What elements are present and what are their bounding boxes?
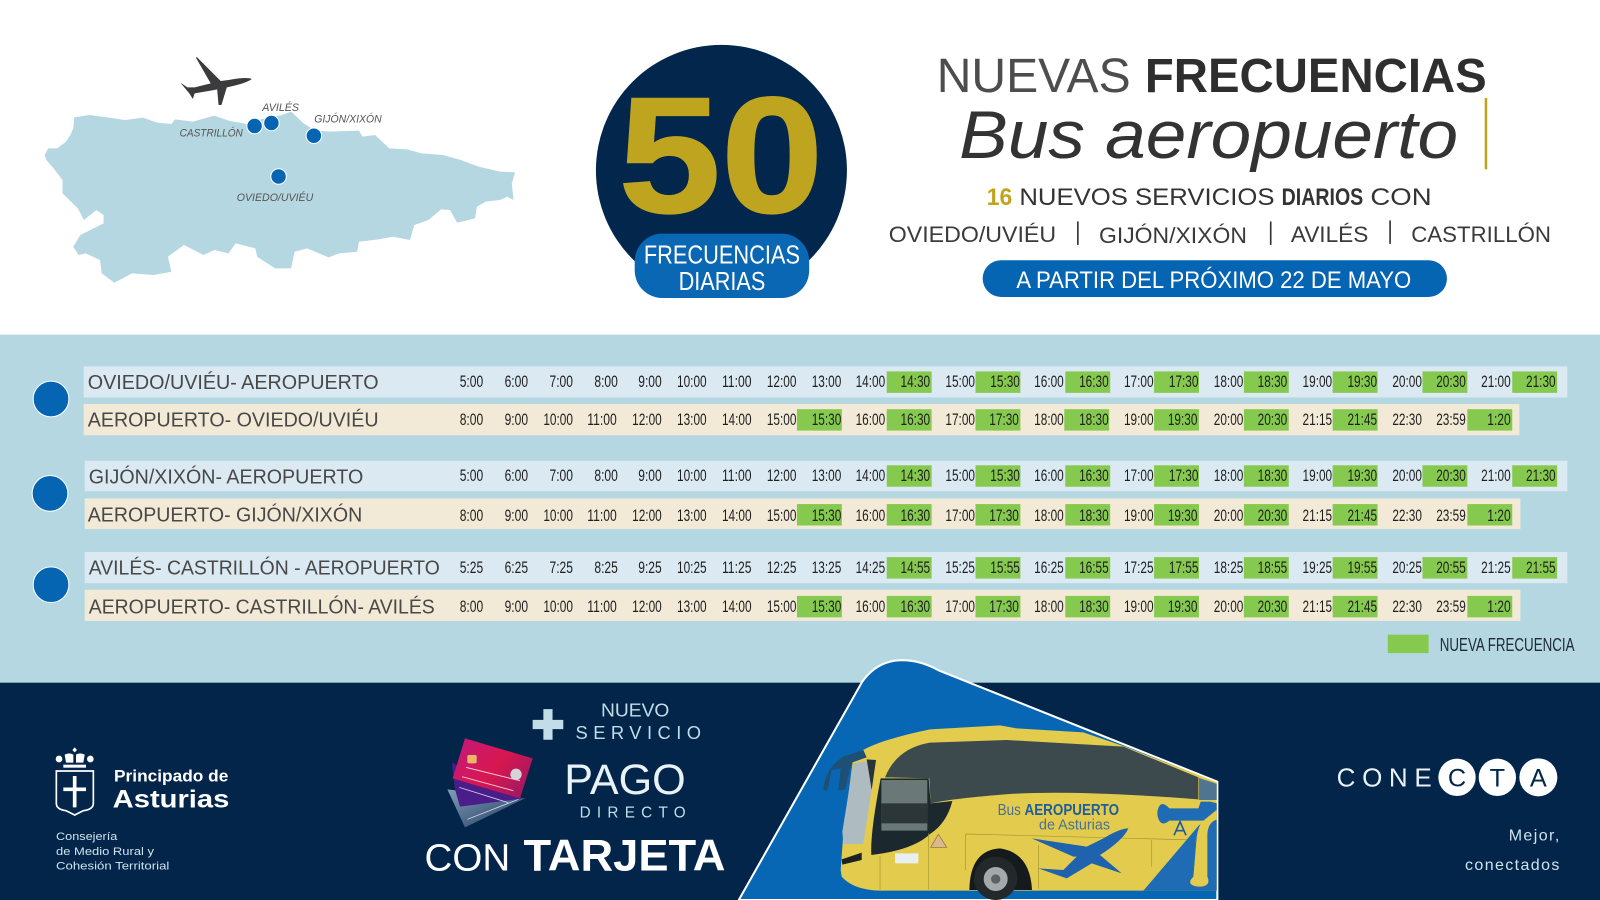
row: Oviedo to airport: 16:00 [1034,373,1064,391]
title block [889,50,1551,297]
row: airport to Oviedo: 1:20 [1487,411,1511,429]
icon: crown [56,747,94,768]
row: airport to Gijón: 1:20 [1487,507,1511,525]
logo: Conecta: A [1530,765,1547,793]
row: airport to Oviedo: 12:00 [632,411,662,429]
row: airport to Avilés: 20:30 [1258,598,1287,616]
row: Avilés to airport: 18:25 [1214,559,1243,577]
row: Avilés to airport [85,552,1567,583]
row: airport to Oviedo: 23:59 [1436,411,1466,429]
row: Oviedo to airport: 21:00 [1481,373,1511,391]
row: Oviedo to airport: 19:30 [1347,373,1377,391]
row: airport to Avilés: 15:30 [812,598,841,616]
panel: timetable [0,335,1600,683]
warning sticker [931,834,947,847]
row: Avilés to airport: 19:25 [1303,559,1332,577]
row: airport to Oviedo: 20:00 [1214,411,1243,429]
row: Oviedo to airport: 7:00 [549,373,573,391]
legend: nueva frecuencia [1388,634,1575,655]
icon: shield with cross [56,771,93,815]
tagline: mejor, conectados: Mejor, [1509,828,1559,845]
row: airport to Gijón: 12:00 [632,507,662,525]
bus lettering: Bus AEROPUERTO [998,802,1119,819]
row: airport to Gijón: 18:00 [1034,507,1064,525]
row: Gijón to airport: 20:00 [1392,467,1422,485]
logo: Conecta [1337,758,1559,874]
row: Gijón to airport: 8:00 [594,467,618,485]
row: Oviedo to airport: 12:00 [767,373,796,391]
row: airport to Gijón: 10:00 [543,507,573,525]
row: airport to Avilés: 16:30 [901,598,930,616]
row: airport to Gijón: 8:00 [460,507,483,525]
bus decal: blue triangle [1143,809,1217,891]
row: Oviedo to airport: 15:30 [990,373,1020,391]
row: Gijón to airport: 16:00 [1034,467,1064,485]
row: Avilés to airport: 12:25 [767,559,796,577]
pill: frecuencias diarias: DIARIAS [679,268,765,296]
row: Avilés to airport: AVILÉS- CASTRILLÓN - AEROPUERTO [89,556,440,579]
icon: airplane [180,57,252,105]
row: airport to Oviedo [84,404,1519,435]
row: Avilés to airport: 5:25 [460,559,483,577]
row: Oviedo to airport: 6:00 [505,373,528,391]
logo: Conecta: C [1448,765,1466,793]
row: airport to Gijón [85,498,1520,529]
text: consejería [56,831,169,872]
row: airport to Avilés: 18:00 [1034,598,1064,616]
row: airport to Avilés: 19:00 [1124,598,1154,616]
bus decal: airplane [1032,828,1128,878]
row: Oviedo to airport: 18:00 [1214,373,1243,391]
subtitle: 16 nuevos servicios [987,184,1432,211]
row: Gijón to airport: 6:00 [505,467,528,485]
row: airport to Oviedo: AEROPUERTO- OVIEDO/UVIÉU [88,409,379,432]
bus sticker [895,853,918,863]
bus side windows [885,740,1198,803]
row: airport to Gijón: 17:00 [945,507,975,525]
row: airport to Oviedo: 9:00 [505,411,528,429]
row: airport to Avilés: 13:00 [677,598,707,616]
row: airport to Gijón: 19:30 [1168,507,1197,525]
bus wheel [969,848,1032,900]
heading: bus aeropuerto: Bus aeropuerto [959,98,1458,173]
text: con tarjeta: TARJETA [523,829,726,880]
row: Oviedo to airport: 17:30 [1169,373,1198,391]
row: Gijón to airport: 14:00 [856,467,885,485]
row: airport to Gijón: 22:30 [1392,507,1422,525]
list of towns: CASTRILLÓN [1411,222,1551,247]
row: Avilés to airport: 21:55 [1526,559,1556,577]
route marker Gijón [32,476,68,511]
row: Oviedo to airport: 14:00 [856,373,885,391]
row: airport to Avilés: 8:00 [460,598,483,616]
row: Gijón to airport: 11:00 [722,467,752,485]
pill: frecuencias diarias: FRECUENCIAS [644,241,800,269]
row: Avilés to airport: 20:55 [1436,559,1466,577]
row: Avilés to airport: 17:25 [1124,559,1154,577]
row: Oviedo to airport [84,366,1567,397]
row: Avilés to airport: 18:55 [1258,559,1287,577]
bus lettering [998,804,1118,830]
bus mirror [823,750,867,791]
row: airport to Gijón: 16:00 [856,507,885,525]
row: Gijón to airport: 18:00 [1214,467,1243,485]
list of towns: GIJÓN/XIXÓN [1099,223,1247,248]
pill: start date [983,260,1447,297]
row: Avilés to airport: 6:25 [505,559,528,577]
row: airport to Gijón: 14:00 [722,507,752,525]
row: Oviedo to airport: 17:00 [1124,373,1154,391]
rear window [1199,778,1217,800]
bus body [841,725,1217,891]
text: con tarjeta [424,829,726,880]
row: airport to Gijón: 18:30 [1079,507,1109,525]
panel: map of Asturias [45,57,515,283]
heading: nuevas frecuencias: FRECUENCIAS [1145,50,1487,103]
row: Oviedo to airport: 11:00 [722,373,752,391]
row: Oviedo to airport: 21:30 [1526,373,1556,391]
map pin: Avilés [261,101,300,131]
row: Oviedo to airport: 13:00 [812,373,841,391]
row: Oviedo to airport: 10:00 [677,373,707,391]
row: Oviedo to airport: OVIEDO/UVIÉU- AEROPUERTO [88,371,379,394]
row: Gijón to airport: 10:00 [677,467,707,485]
row: Gijón to airport: 9:00 [638,467,662,485]
row: airport to Oviedo: 16:30 [901,411,930,429]
row: airport to Oviedo: 19:30 [1168,411,1197,429]
row: Avilés to airport: 14:55 [901,559,930,577]
row: Gijón to airport: 17:00 [1124,467,1154,485]
row: Gijón to airport: 5:00 [460,467,483,485]
row: Oviedo to airport: 15:00 [945,373,975,391]
row: Oviedo to airport: 20:00 [1392,373,1422,391]
bus decal: cross stem [1190,810,1217,887]
bus decal: cross arm [1157,802,1217,823]
row: Avilés to airport: 19:55 [1347,559,1377,577]
row: Gijón to airport: 12:00 [767,467,796,485]
map pin: Oviedo [237,169,314,204]
row: Avilés to airport: 15:55 [990,559,1020,577]
badge: 50 frecuencias diarias [596,45,847,298]
row: airport to Oviedo: 17:00 [945,411,975,429]
subtitle: 16 nuevos servicios: CON [1370,184,1432,211]
list of towns [889,220,1551,248]
row: airport to Avilés: 17:00 [945,598,975,616]
row: airport to Oviedo: 20:30 [1258,411,1287,429]
text: nuevo servicio: SERVICIO [576,722,701,743]
row: airport to Avilés: 11:00 [587,598,617,616]
heading: nuevas frecuencias [937,50,1487,103]
row: airport to Oviedo: 17:30 [989,411,1019,429]
list of towns: OVIEDO/UVIÉU [889,222,1056,247]
row: Gijón to airport: 14:30 [901,467,930,485]
row: Oviedo to airport: 5:00 [460,373,483,391]
map pin: Gijón [306,112,382,143]
row: Avilés to airport: 14:25 [856,559,885,577]
row: airport to Oviedo: 18:30 [1079,411,1109,429]
text: consejería: Cohesión Territorial [56,860,169,872]
text: pago directo: PAGO [564,756,686,804]
row: Gijón to airport: 16:30 [1079,467,1109,485]
row: airport to Avilés: 15:00 [767,598,796,616]
map pin: Avilés: AVILÉS [261,101,300,114]
row: airport to Avilés: 17:30 [989,598,1019,616]
bus panel lines [880,833,1197,889]
row: Gijón to airport: 20:30 [1436,467,1466,485]
row: Avilés to airport: 10:25 [677,559,707,577]
text: Principado de Asturias [113,768,229,814]
row: airport to Avilés: AEROPUERTO- CASTRILLÓN- AVILÉS [89,595,435,618]
illustration: bus [823,725,1217,900]
row: airport to Gijón: 20:30 [1258,507,1287,525]
subtitle: 16 nuevos servicios: NUEVOS SERVICIOS [1019,184,1274,211]
row: airport to Oviedo: 15:30 [812,411,841,429]
row: airport to Gijón: 11:00 [587,507,617,525]
map pin: Castrillón [180,118,262,140]
row: airport to Gijón: 16:30 [901,507,930,525]
row: Avilés to airport: 9:25 [638,559,662,577]
row: Gijón to airport: 18:30 [1258,467,1287,485]
route marker Oviedo [33,381,69,417]
row: Gijón to airport [85,461,1567,491]
subtitle: 16 nuevos servicios: 16 [987,184,1012,211]
callout: nuevo servicio [533,699,701,743]
text: nuevo servicio: NUEVO [601,699,669,720]
row: Gijón to airport: 15:30 [990,467,1020,485]
bus headlight [842,853,862,865]
logo: Conecta: T [1490,765,1505,793]
text: Principado de Asturias: Asturias [113,786,229,814]
gold accent bar [1485,98,1487,169]
bus decal: small A [1174,822,1186,835]
row: Gijón to airport: GIJÓN/XIXÓN- AEROPUERTO [89,466,363,489]
row: Oviedo to airport: 8:00 [594,373,618,391]
row: airport to Oviedo: 22:30 [1392,411,1422,429]
map pin: Oviedo: OVIEDO/UVIÉU [237,191,314,204]
bus door window [881,780,927,831]
row: Avilés to airport: 17:55 [1169,559,1198,577]
row: Avilés to airport: 16:25 [1034,559,1064,577]
row: Gijón to airport: 19:00 [1303,467,1332,485]
row: airport to Gijón: 23:59 [1436,507,1466,525]
row: airport to Oviedo: 13:00 [677,411,707,429]
row: Oviedo to airport: 18:30 [1258,373,1287,391]
row: Avilés to airport: 8:25 [594,559,618,577]
bus windscreen [842,760,876,844]
map pin: Gijón: GIJÓN/XIXÓN [314,112,382,125]
row: airport to Avilés: 20:00 [1214,598,1243,616]
blue bus panel [739,660,1217,900]
row: airport to Gijón: 13:00 [677,507,707,525]
row: Avilés to airport: 15:25 [945,559,975,577]
pill: frecuencias diarias [635,234,809,298]
row: airport to Oviedo: 8:00 [460,411,483,429]
row: airport to Gijón: 21:15 [1303,507,1332,525]
tagline: mejor, conectados: conectados [1465,857,1559,874]
row: airport to Gijón: 9:00 [505,507,528,525]
heading: nuevas frecuencias: NUEVAS [937,50,1131,103]
row: Gijón to airport: 17:30 [1169,467,1198,485]
row: airport to Gijón: 17:30 [989,507,1019,525]
row: airport to Avilés: 22:30 [1392,598,1422,616]
icon: plus [533,709,563,740]
text: consejería: de Medio Rural y [56,846,154,858]
text: nuevo servicio [576,699,701,743]
row: Gijón to airport: 13:00 [812,467,841,485]
logo: Principado de Asturias [56,747,229,872]
row: airport to Avilés: 21:45 [1347,598,1377,616]
row: Gijón to airport: 21:30 [1526,467,1556,485]
row: airport to Oviedo: 18:00 [1034,411,1064,429]
row: airport to Avilés: 21:15 [1303,598,1332,616]
row: Avilés to airport: 7:25 [549,559,573,577]
row: Gijón to airport: 15:00 [945,467,975,485]
subtitle: 16 nuevos servicios: DIARIOS [1282,184,1363,211]
row: airport to Oviedo: 21:15 [1303,411,1332,429]
map shape [45,112,515,283]
row: airport to Gijón: 20:00 [1214,507,1243,525]
number 50: 50 [618,63,823,248]
row: airport to Gijón: 21:45 [1347,507,1377,525]
row: airport to Avilés: 10:00 [543,598,573,616]
row: airport to Avilés: 1:20 [1487,598,1511,616]
row: airport to Oviedo: 11:00 [587,411,617,429]
row: airport to Oviedo: 15:00 [767,411,796,429]
map pin: Castrillón: CASTRILLÓN [180,127,243,140]
row: Oviedo to airport: 16:30 [1079,373,1109,391]
row: Avilés to airport: 21:25 [1481,559,1511,577]
row: airport to Avilés: 19:30 [1168,598,1197,616]
logo: Conecta: CONE [1337,763,1432,793]
row: airport to Gijón: 15:00 [767,507,796,525]
row: airport to Oviedo: 16:00 [856,411,885,429]
row: airport to Oviedo: 10:00 [543,411,573,429]
row: airport to Oviedo: 19:00 [1124,411,1154,429]
row: airport to Avilés: 18:30 [1079,598,1109,616]
row: Oviedo to airport: 19:00 [1303,373,1332,391]
row: airport to Oviedo: 14:00 [722,411,752,429]
row: airport to Avilés [85,590,1520,621]
row: airport to Avilés: 12:00 [632,598,662,616]
panel: footer [0,683,1600,900]
tagline: mejor, conectados [1465,828,1559,874]
row: Avilés to airport: 13:25 [812,559,841,577]
row: Avilés to airport: 20:25 [1392,559,1422,577]
row: Gijón to airport: 21:00 [1481,467,1511,485]
row: airport to Gijón: AEROPUERTO- GIJÓN/XIXÓN [88,503,362,526]
bus door surround [871,778,952,855]
row: airport to Avilés: 9:00 [505,598,528,616]
text: consejería: Consejería [56,831,118,843]
row: airport to Avilés: 23:59 [1436,598,1466,616]
row: Oviedo to airport: 9:00 [638,373,662,391]
row: airport to Gijón: 15:30 [812,507,841,525]
text: con tarjeta: CON [424,836,510,878]
row: Oviedo to airport: 20:30 [1436,373,1466,391]
text: pago directo: DIRECTO [580,804,686,821]
row: Avilés to airport: 16:55 [1079,559,1109,577]
pill: start date: A PARTIR DEL PRÓXIMO 22 DE MAYO [1016,267,1411,294]
row: airport to Oviedo: 21:45 [1347,411,1377,429]
route marker Avilés [33,567,69,603]
bus lettering: de Asturias [1039,817,1110,833]
list of towns: AVILÉS [1291,222,1368,247]
row: airport to Avilés: 16:00 [856,598,885,616]
text: Principado de Asturias: Principado de [114,768,228,786]
row: airport to Gijón: 19:00 [1124,507,1154,525]
row: Gijón to airport: 19:30 [1347,467,1377,485]
row: Avilés to airport: 11:25 [722,559,752,577]
row: airport to Avilés: 14:00 [722,598,752,616]
row: Oviedo to airport: 14:30 [901,373,930,391]
row: Gijón to airport: 7:00 [549,467,573,485]
icon: credit cards [447,738,533,827]
